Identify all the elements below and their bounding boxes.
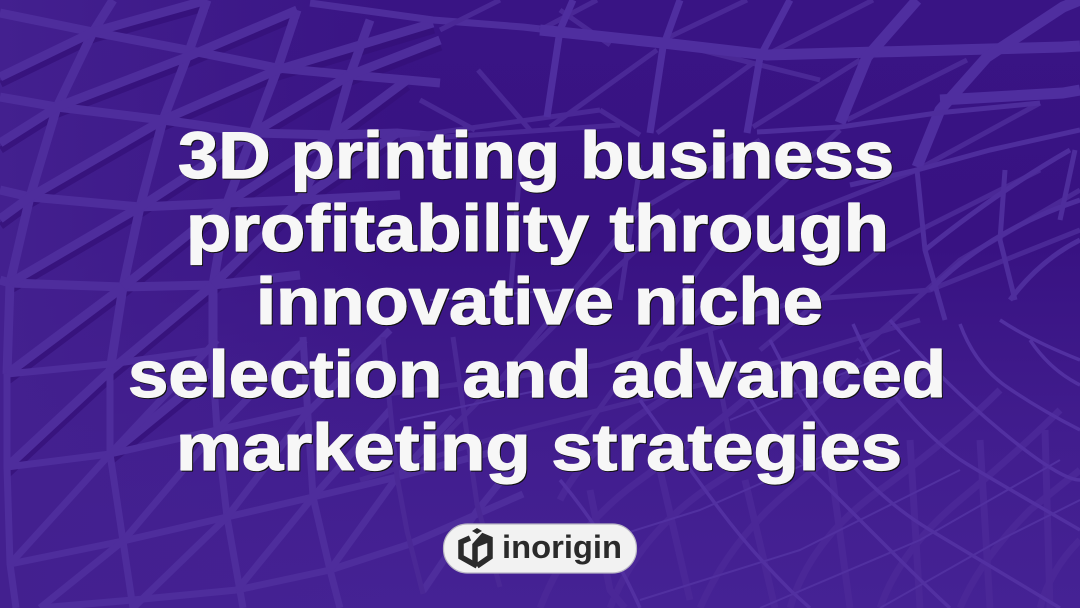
- title: marketing strategies: [176, 410, 902, 484]
- title: innovative niche: [256, 264, 823, 338]
- title: selection and advanced: [128, 337, 946, 411]
- icon: inorigin hexagon cube: [461, 528, 490, 566]
- logo pill: inorigin: [444, 524, 636, 573]
- title: [128, 118, 946, 484]
- title: 3D printing business: [178, 118, 894, 192]
- wordmark: inorigin: [502, 529, 622, 565]
- title: profitability through: [186, 191, 889, 265]
